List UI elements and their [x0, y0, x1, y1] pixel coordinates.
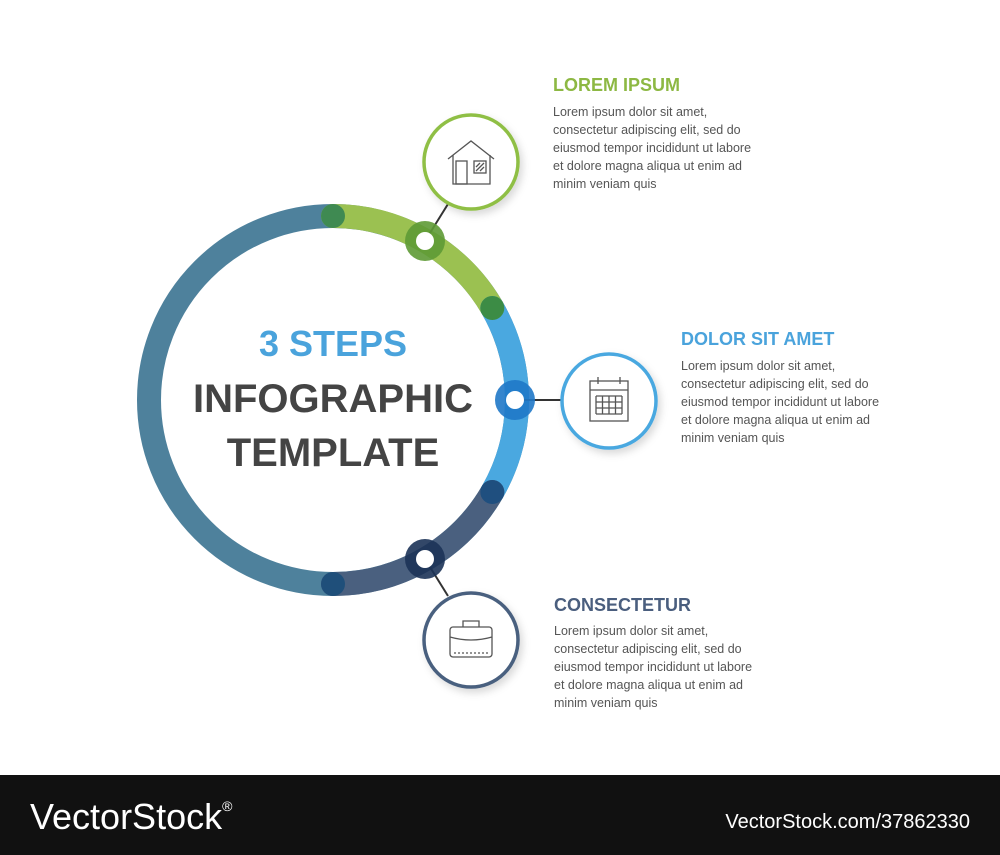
- text block: dolor sit amet: DOLOR SIT AMET: [681, 329, 834, 349]
- text block: consectetur: [554, 595, 752, 710]
- text block: consectetur: minim veniam quis: [554, 696, 658, 710]
- text block: dolor sit amet: consectetur adipiscing elit, sed do: [681, 377, 869, 391]
- text block: consectetur: eiusmod tempor incididunt ut labore: [554, 660, 752, 674]
- center title: INFOGRAPHIC: [193, 377, 473, 421]
- text block: lorem ipsum: eiusmod tempor incididunt ut labore: [553, 141, 751, 155]
- text block: consectetur: consectetur adipiscing elit, sed do: [554, 642, 742, 656]
- center title: TEMPLATE: [227, 431, 439, 475]
- icon circle: calendar: [562, 354, 656, 448]
- text block: dolor sit amet: [681, 329, 879, 445]
- text block: lorem ipsum: et dolore magna aliqua ut enim ad: [553, 159, 742, 173]
- node: step 2: [495, 380, 535, 420]
- connector lines: [425, 204, 562, 596]
- center title: [193, 323, 473, 475]
- text block: dolor sit amet: eiusmod tempor incididunt ut labore: [681, 395, 879, 409]
- center title: 3 STEPS: [259, 323, 407, 364]
- segment: blue: [492, 308, 517, 492]
- text block: consectetur: Lorem ipsum dolor sit amet,: [554, 624, 708, 638]
- text block: consectetur: CONSECTETUR: [554, 595, 691, 615]
- footer bar: VectorStock: [30, 796, 222, 837]
- node: step 1: [405, 221, 445, 261]
- text block: dolor sit amet: et dolore magna aliqua ut enim ad: [681, 413, 870, 427]
- node: step 3: [405, 539, 445, 579]
- footer bar: VectorStock.com/37862330: [725, 811, 970, 833]
- segment: navy: [333, 492, 492, 584]
- icon circle: briefcase: [424, 593, 518, 687]
- text block: lorem ipsum: consectetur adipiscing elit, sed do: [553, 123, 741, 137]
- segment: green: [333, 216, 492, 308]
- text block: consectetur: et dolore magna aliqua ut enim ad: [554, 678, 743, 692]
- text block: dolor sit amet: Lorem ipsum dolor sit amet,: [681, 359, 835, 373]
- icon circle: house: [424, 115, 518, 209]
- main ring: [149, 204, 517, 596]
- text block: lorem ipsum: [553, 75, 751, 191]
- text block: lorem ipsum: minim veniam quis: [553, 177, 657, 191]
- text block: lorem ipsum: LOREM IPSUM: [553, 75, 680, 95]
- footer bar: [0, 775, 1000, 855]
- footer bar: ®: [222, 798, 233, 814]
- text block: dolor sit amet: minim veniam quis: [681, 431, 785, 445]
- text block: lorem ipsum: Lorem ipsum dolor sit amet,: [553, 105, 707, 119]
